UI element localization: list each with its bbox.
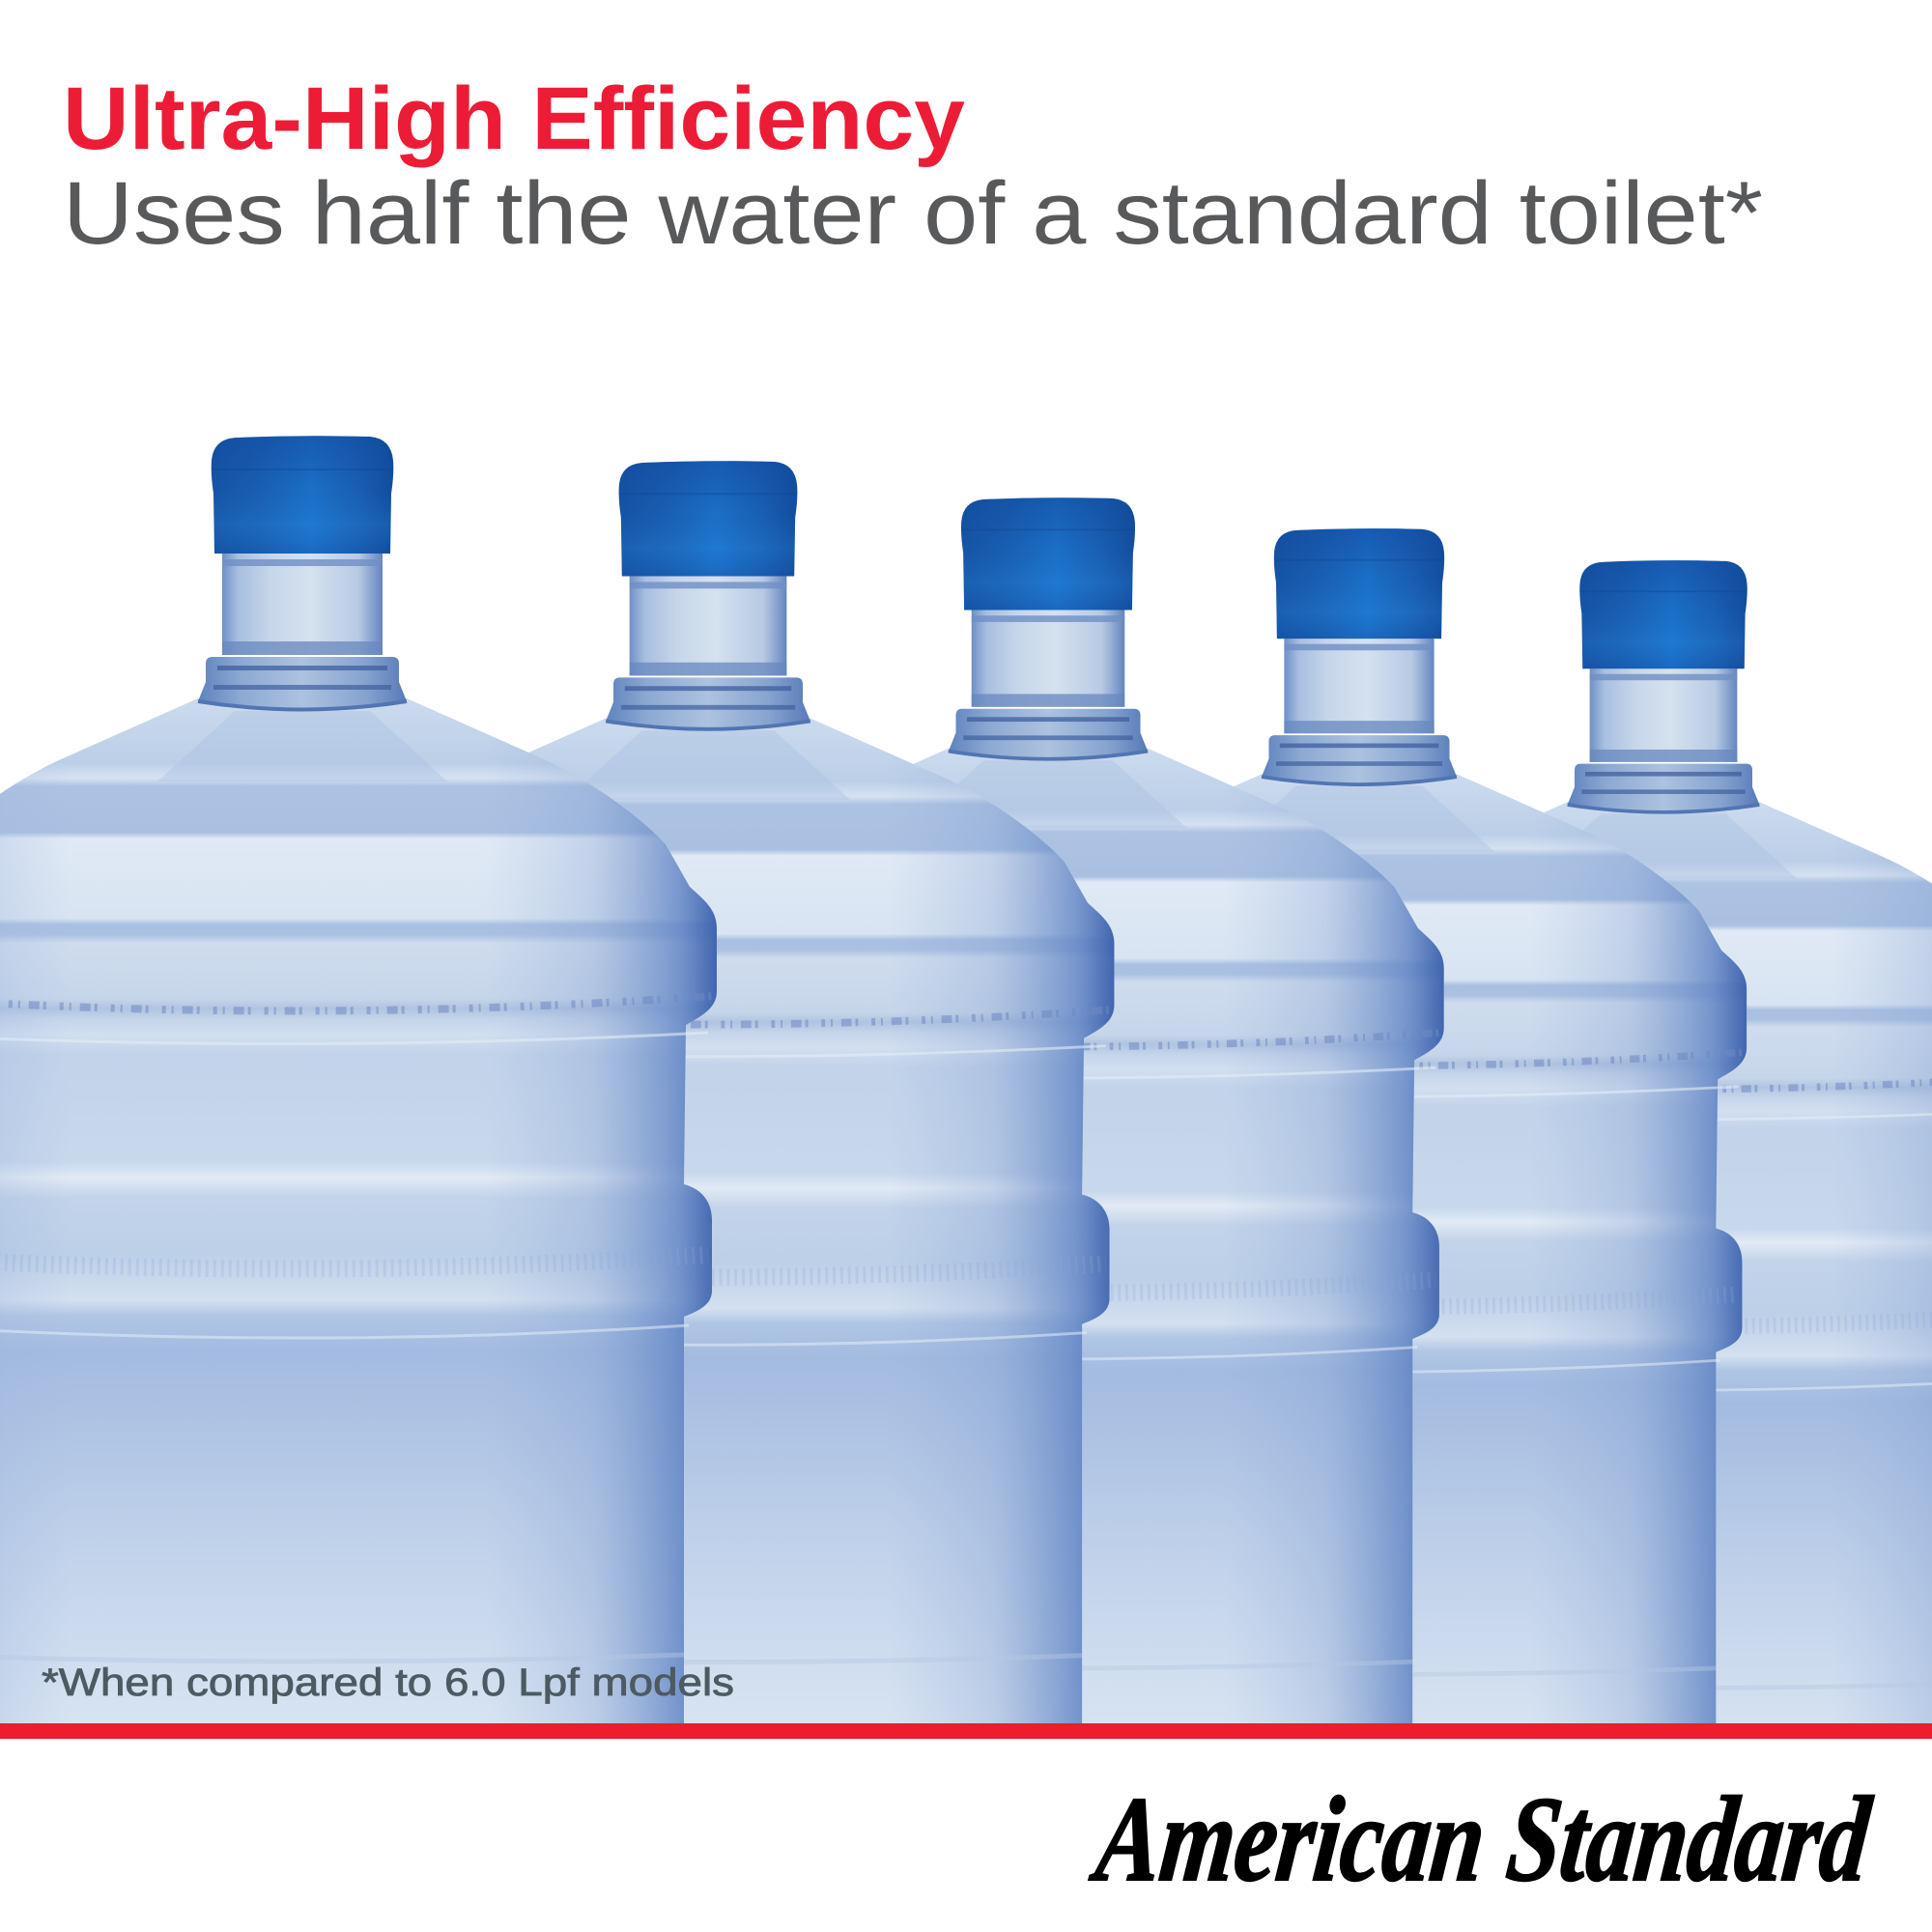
bottle 2 — [302, 461, 1114, 1786]
red divider bar — [0, 1723, 1932, 1739]
bottle 5 — [1282, 560, 1932, 1804]
bottle 3 — [652, 497, 1444, 1789]
bottles photo — [0, 436, 1932, 1804]
bottle 4 — [972, 528, 1747, 1793]
title: Ultra-High Efficiency: Ultra-High Efficiency — [63, 70, 965, 168]
subtitle: Uses half the water of a standard toilet* — [63, 164, 1763, 263]
bottle 1 — [0, 436, 717, 1788]
footnote: *When compared to 6.0 Lpf models — [42, 1662, 734, 1704]
